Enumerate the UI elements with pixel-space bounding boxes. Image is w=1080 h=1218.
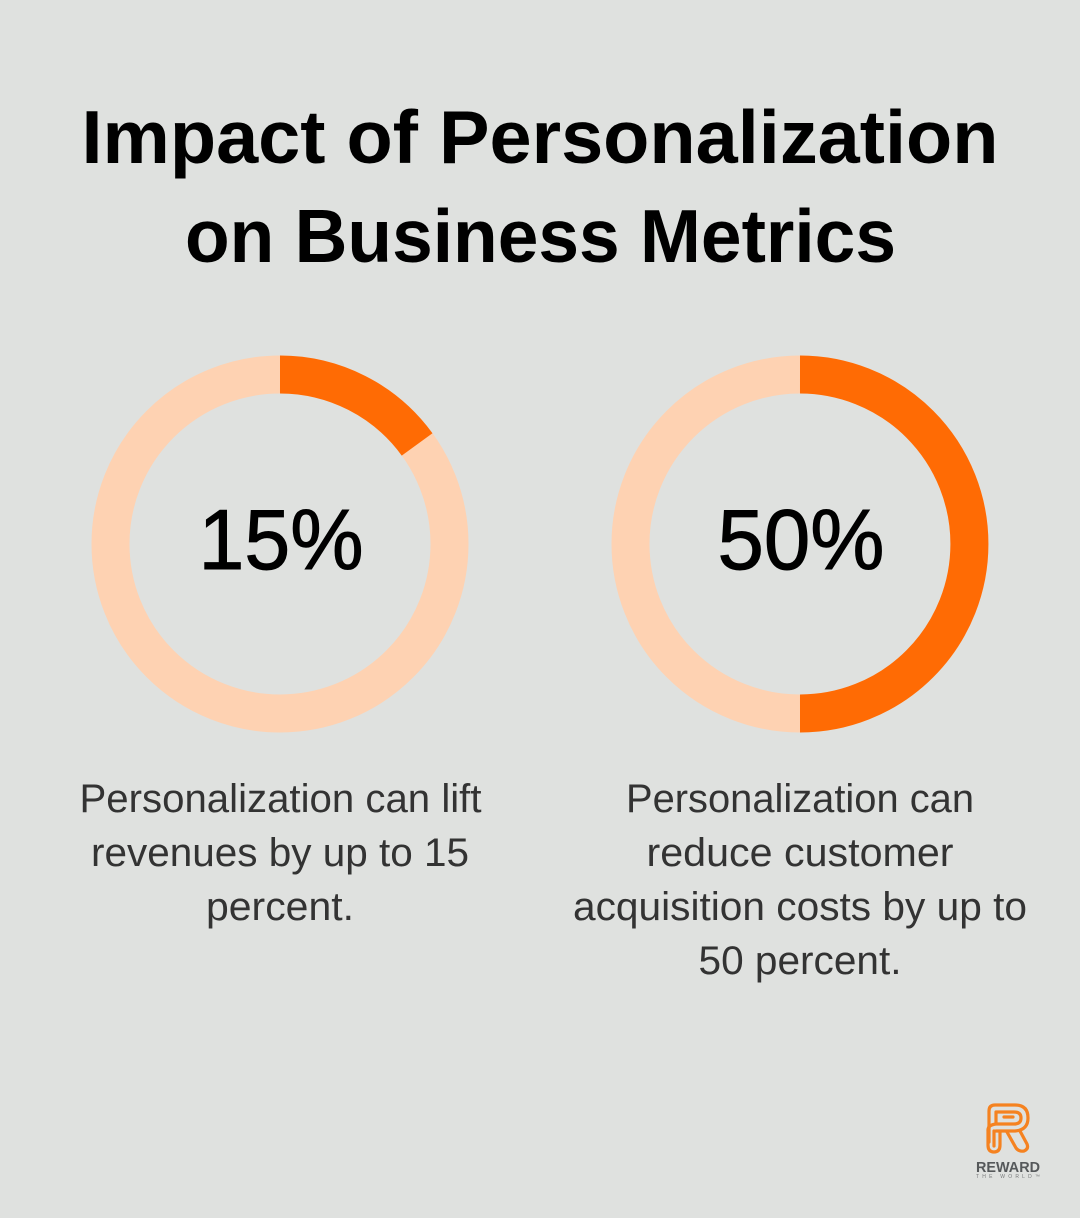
description: acquisition cost reduction: acquisition costs by up to xyxy=(573,885,1027,929)
panel: revenue lift xyxy=(80,374,482,929)
panel: acquisition cost reduction xyxy=(573,374,1027,983)
donut chart: 15 percent xyxy=(110,374,450,714)
value: 15%: 15% xyxy=(198,493,364,588)
description: acquisition cost reduction: Personalization can xyxy=(626,777,974,821)
value: 50%: 50% xyxy=(718,493,884,588)
title: Impact of Personalization xyxy=(82,95,998,179)
icon: R mark xyxy=(988,1105,1028,1152)
description: revenue lift: revenues by up to 15 xyxy=(91,831,469,875)
logo: Reward the World xyxy=(976,1105,1040,1180)
description: acquisition cost reduction: reduce customer xyxy=(646,831,954,875)
description: acquisition cost reduction: 50 percent. xyxy=(698,939,902,983)
title: on Business Metrics xyxy=(185,194,896,278)
description: revenue lift xyxy=(80,777,482,929)
description: acquisition cost reduction xyxy=(573,777,1027,983)
wordmark: REWARD xyxy=(976,1160,1040,1176)
tagline: THE WORLD™ xyxy=(976,1174,1040,1180)
description: revenue lift: percent. xyxy=(206,885,354,929)
description: revenue lift: Personalization can lift xyxy=(80,777,482,821)
donut chart: 50 percent xyxy=(630,374,970,714)
title xyxy=(82,95,998,278)
